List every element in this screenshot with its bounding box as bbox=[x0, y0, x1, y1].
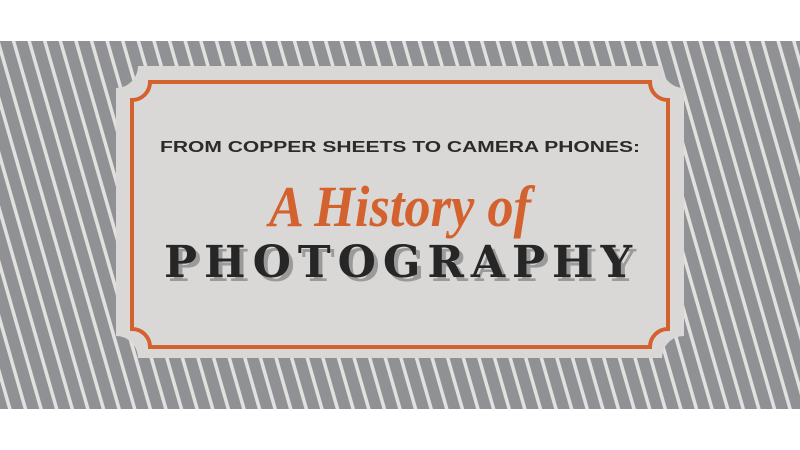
plate bbox=[116, 66, 684, 358]
script title: A History of bbox=[266, 174, 536, 239]
main title: PHOTOGRAPHY bbox=[164, 237, 638, 288]
main title: PHOTOGRAPHY bbox=[168, 241, 642, 292]
orange frame bbox=[132, 82, 668, 347]
subtitle: FROM COPPER SHEETS TO CAMERA PHONES: bbox=[160, 139, 640, 156]
